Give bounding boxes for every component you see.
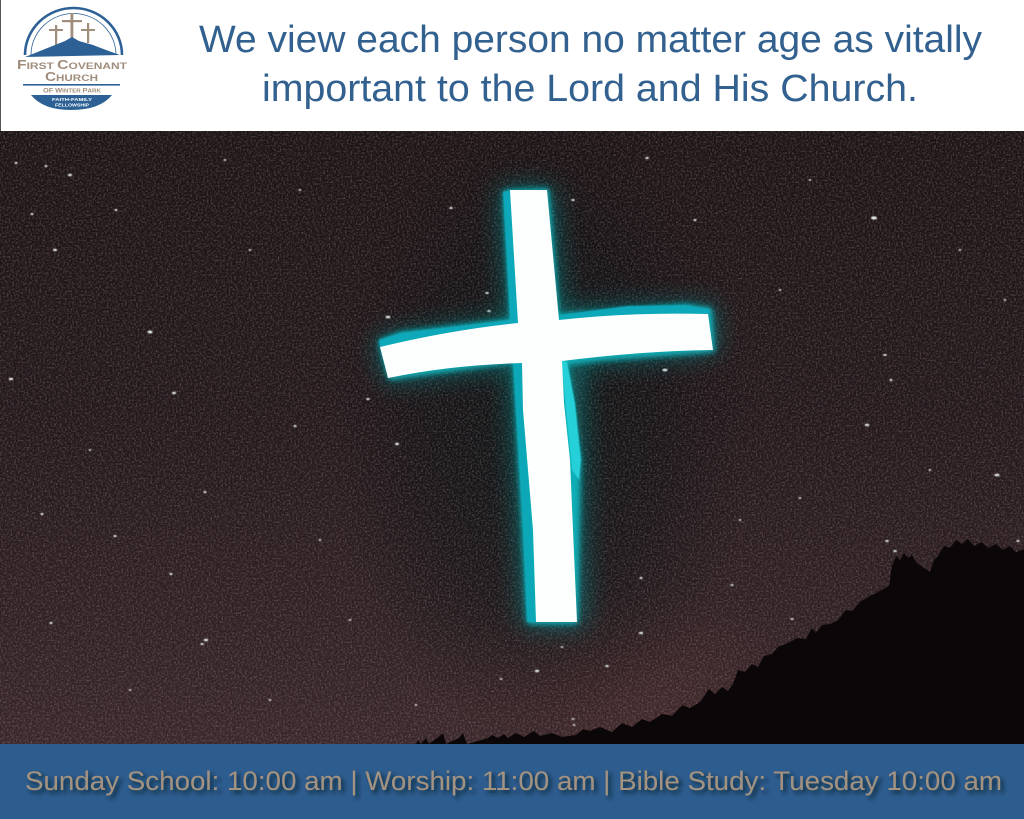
logo name: FIRST COVENANT [17, 58, 127, 72]
logo arcs [25, 8, 122, 55]
cross white core [380, 190, 713, 622]
stars [9, 157, 1020, 726]
header band [0, 0, 1024, 131]
footer band [0, 744, 1024, 819]
logo crosses [49, 13, 95, 45]
logo [17, 8, 127, 110]
hillside silhouette with tree line [416, 539, 1024, 744]
headline [199, 19, 982, 110]
glowing cross [376, 188, 716, 626]
headline: important to the Lord and His Church. [262, 68, 918, 110]
logo: FAITH-FAMILY [52, 97, 92, 102]
logo mountain [25, 37, 120, 57]
logo: FELLOWSHIP [55, 102, 89, 108]
cross teal faces [379, 190, 519, 347]
service times: Sunday School: 10:00 am | Worship: 11:00 am | Bible Study: Tuesday 10:00 am [25, 766, 1002, 796]
cross inner teal halo [378, 188, 715, 624]
logo: CHURCH [45, 70, 98, 84]
logo: OF W INTER PARK [43, 88, 101, 94]
headline: We view each person no matter age as vitally [199, 19, 982, 61]
logo banner [31, 95, 112, 110]
cross outer glow [376, 188, 716, 626]
